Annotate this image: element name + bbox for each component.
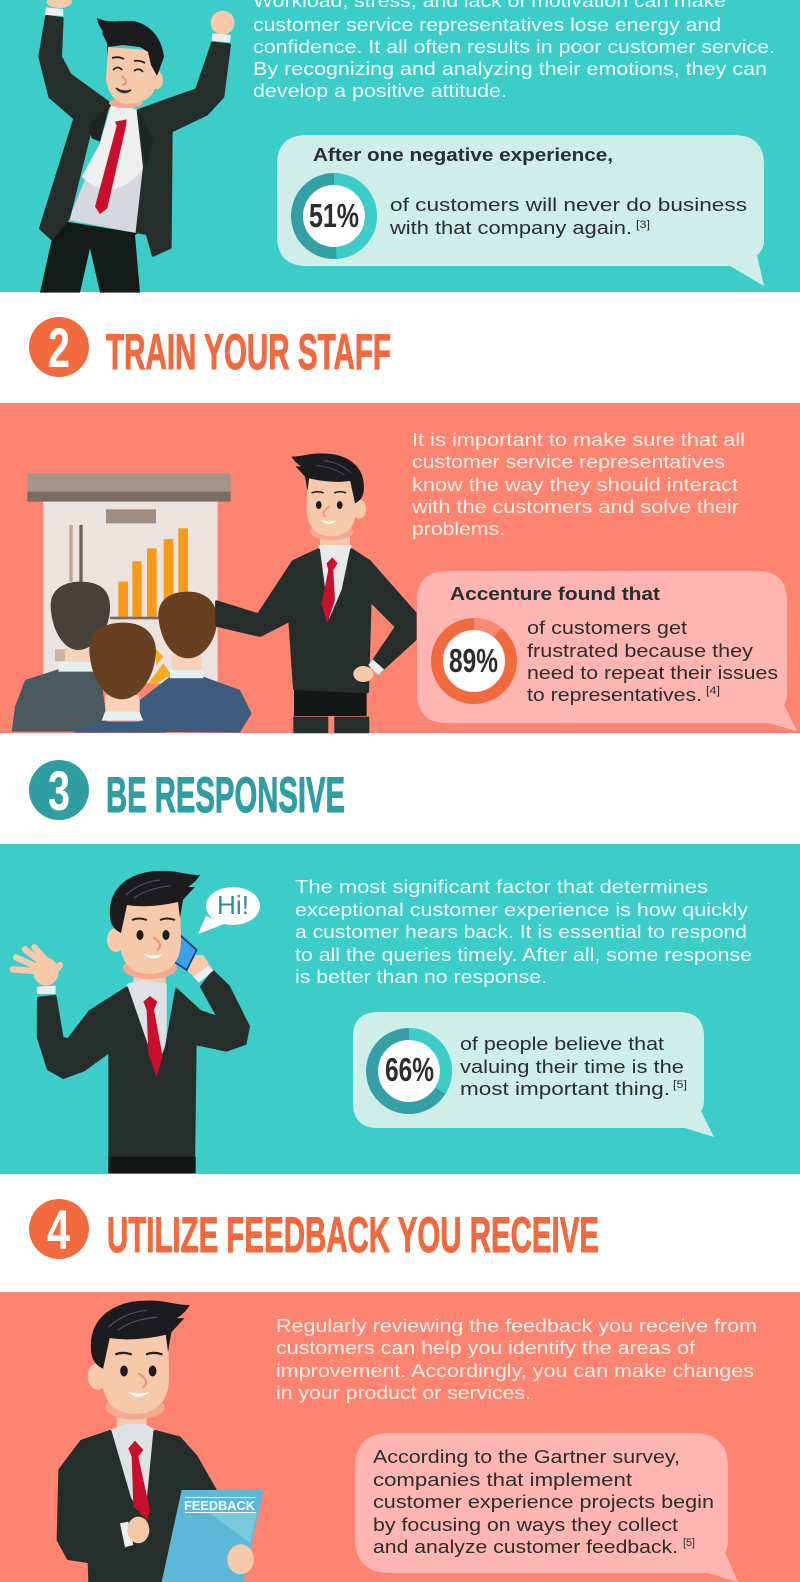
callout: Gartner survey bubble: customer experience projects begin <box>373 1492 714 1512</box>
text block: intro paragraph: confidence. It all often results in poor customer service. <box>253 37 775 57</box>
text block: feedback paragraph: in your product or services. <box>276 1383 531 1403</box>
illustration: cheering businessman <box>40 0 235 293</box>
callout: 89% statistic bubble: [4] <box>706 685 720 697</box>
illustration: presentation screen with audience <box>12 473 252 733</box>
text block: feedback paragraph <box>276 1316 757 1403</box>
text block: feedback paragraph: customers can help you identify the areas of <box>276 1338 696 1358</box>
callout: Gartner survey bubble: [5] <box>683 1537 695 1549</box>
text block: training paragraph <box>411 430 745 539</box>
donut chart: 89%: 89% <box>449 642 498 679</box>
text block: intro paragraph: By recognizing and analyzing their emotions, they can <box>253 59 767 79</box>
callout: 66% statistic bubble: [5] <box>673 1079 687 1091</box>
illustration: businessman on the phone <box>13 871 248 1173</box>
text block: training paragraph: problems. <box>412 519 505 539</box>
text block: training paragraph: know the way they should interact <box>412 475 738 495</box>
heading: step 2 train your staff: 2 <box>48 316 70 379</box>
text block: responsiveness paragraph: to all the queries timely. After all, some response <box>295 945 752 965</box>
callout: Gartner survey bubble: companies that implement <box>373 1470 632 1490</box>
panel: teal responsiveness section <box>0 844 800 1174</box>
callout: 66% statistic bubble: most important thing. <box>460 1079 670 1099</box>
heading: step 3 be responsive: 3 <box>48 759 70 822</box>
callout: 51% statistic bubble: After one negative experience, <box>313 145 613 165</box>
text block: responsiveness paragraph: The most significant factor that determines <box>295 877 708 897</box>
text block: feedback paragraph: improvement. Accordingly, you can make changes <box>276 1361 754 1381</box>
callout: Gartner survey bubble: by focusing on ways they collect <box>373 1515 678 1535</box>
callout: Gartner survey bubble: and analyze customer feedback. <box>373 1537 678 1557</box>
text block: intro paragraph: develop a positive attitude. <box>253 81 507 101</box>
callout: 89% statistic bubble: to representatives. <box>527 685 702 705</box>
donut chart: 51% <box>297 179 371 253</box>
callout: 89% statistic bubble: Accenture found that <box>450 584 660 604</box>
text block: training paragraph: It is important to make sure that all <box>412 430 745 450</box>
text block: training paragraph: customer service representatives <box>412 452 725 472</box>
callout: 66% statistic bubble: of people believe that <box>460 1034 664 1054</box>
callout: 51% statistic bubble: of customers will never do business <box>390 195 747 215</box>
callout: 89% statistic bubble: need to repeat their issues <box>527 663 778 683</box>
text block: intro paragraph: customer service representatives lose energy and <box>253 15 721 35</box>
heading: step 2 train your staff <box>29 316 391 380</box>
callout: Gartner survey bubble <box>355 1433 738 1582</box>
donut chart: 66% <box>372 1034 446 1108</box>
callout: 89% statistic bubble: frustrated because they <box>527 641 753 661</box>
illustration: businessman holding feedback form <box>58 1300 263 1582</box>
callout: Gartner survey bubble: According to the Gartner survey, <box>373 1447 680 1467</box>
illustration: presenter businessman <box>217 453 415 733</box>
heading: step 2 train your staff: TRAIN YOUR STAFF <box>106 324 391 380</box>
callout: Hi! speech bubble <box>198 887 260 934</box>
donut chart: 89% <box>437 624 511 698</box>
callout: 66% statistic bubble <box>353 1012 714 1137</box>
callout: 89% statistic bubble: of customers get <box>527 618 687 638</box>
heading: step 3 be responsive: BE RESPONSIVE <box>106 767 345 823</box>
text block: responsiveness paragraph: exceptional customer experience is how quickly <box>295 900 748 920</box>
heading: step 3 be responsive <box>29 759 345 823</box>
text block: responsiveness paragraph: is better than no response. <box>295 967 547 987</box>
text block: training paragraph: with the customers and solve their <box>411 497 739 517</box>
text block: responsiveness paragraph <box>295 877 752 987</box>
text block: feedback paragraph: Regularly reviewing the feedback you receive from <box>276 1316 757 1336</box>
callout: 51% statistic bubble: [3] <box>636 219 650 231</box>
panel: teal intro section <box>0 0 800 292</box>
callout: Hi! speech bubble: Hi! <box>217 890 249 920</box>
panel: coral feedback section <box>0 1292 800 1582</box>
heading: step 4 utilize feedback <box>29 1198 599 1263</box>
callout: 66% statistic bubble: valuing their time is the <box>460 1057 684 1077</box>
donut chart: 66%: 66% <box>385 1051 434 1088</box>
donut chart: 51%: 51% <box>309 197 359 234</box>
heading: step 4 utilize feedback: 4 <box>47 1198 70 1261</box>
text block: intro paragraph <box>253 0 775 101</box>
callout: 89% statistic bubble <box>417 571 797 731</box>
panel: coral training section <box>0 403 800 733</box>
label: FEEDBACK form title: FEEDBACK <box>184 1498 256 1513</box>
callout: 51% statistic bubble: with that company again. <box>389 218 632 238</box>
text block: responsiveness paragraph: a customer hears back. It is essential to respond <box>295 922 747 942</box>
callout: 51% statistic bubble <box>277 135 764 286</box>
